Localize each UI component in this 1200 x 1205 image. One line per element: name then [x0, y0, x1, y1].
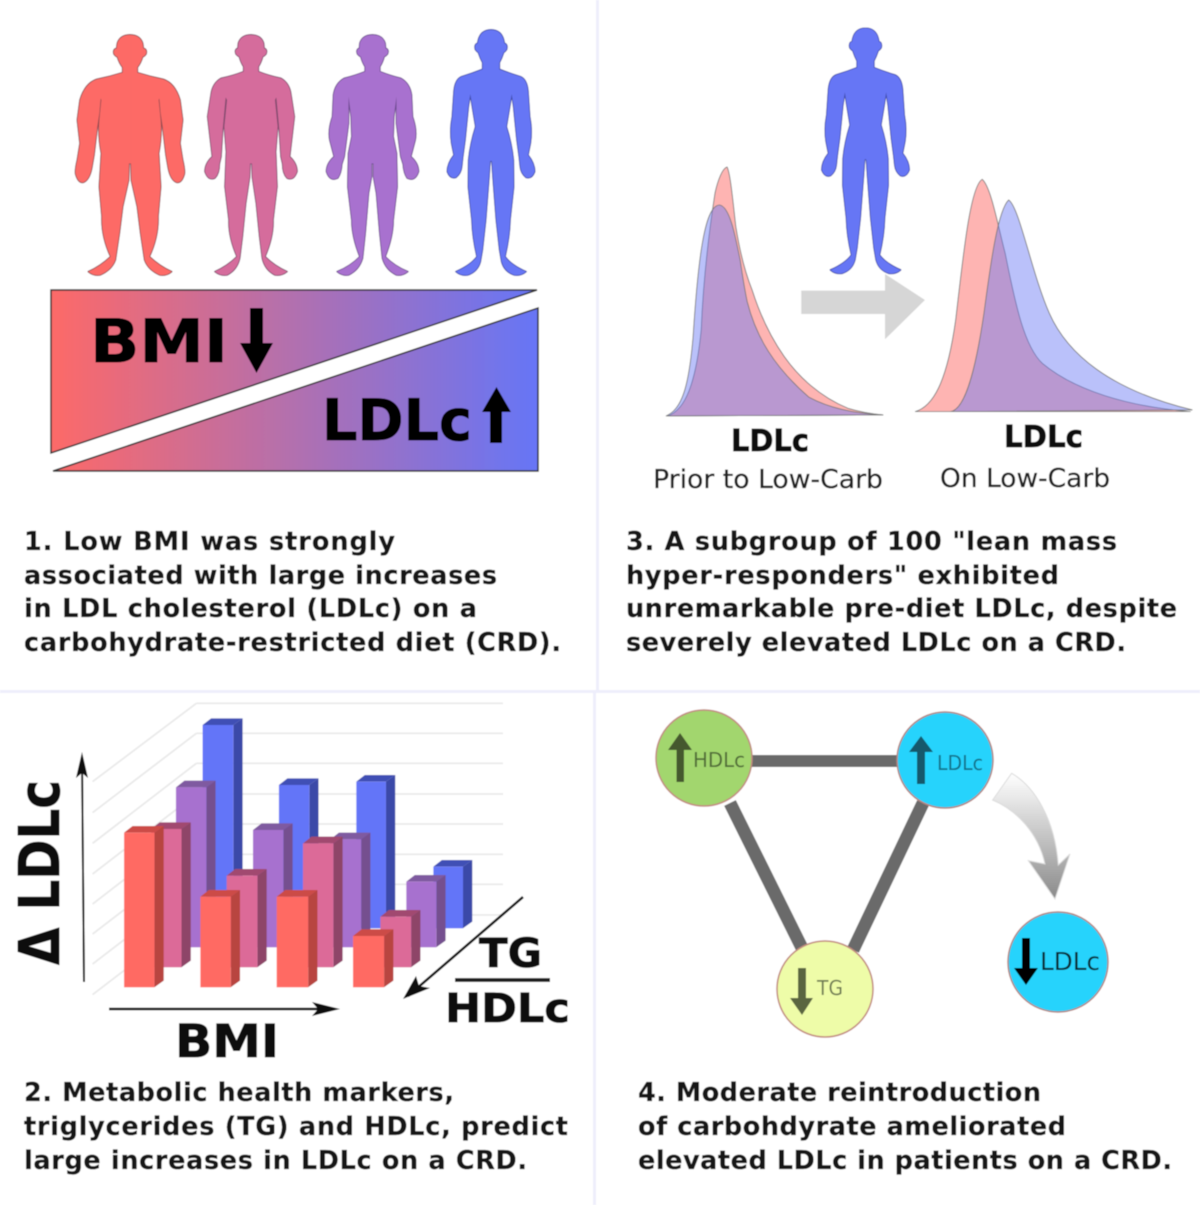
- arrow: y axis: [76, 752, 88, 982]
- arrow: x axis: [109, 1002, 340, 1016]
- caption 1: associated with large increases: [24, 561, 497, 591]
- caption 4: 4. Moderate reintroduction: [638, 1078, 1041, 1108]
- node: HDLc: HDLc: [693, 748, 745, 772]
- label: BMI: BMI: [175, 1015, 279, 1068]
- label: LDLc prior: LDLc: [731, 424, 809, 459]
- connector: HDLc to TG: [730, 803, 802, 948]
- figure: lean blue body: [447, 30, 535, 275]
- distribution: on low-carb: [915, 179, 1192, 412]
- caption 4: [638, 1078, 1172, 1176]
- bars: red row: [124, 826, 393, 987]
- caption 1: 1. Low BMI was strongly: [24, 527, 395, 557]
- caption 3: unremarkable pre-diet LDLc, despite: [626, 594, 1177, 624]
- caption 2: [24, 1078, 568, 1176]
- node: lowered LDLc: LDLc: [1040, 947, 1100, 976]
- label: TG over HDLc: [445, 931, 570, 1032]
- caption 2: large increases in LDLc on a CRD.: [24, 1146, 527, 1176]
- panel: 3D bar chart: [8, 703, 570, 1176]
- node: lowered LDLc: [1008, 912, 1108, 1012]
- figure: lean blue body: [822, 28, 909, 273]
- caption 4: elevated LDLc in patients on a CRD.: [638, 1146, 1172, 1176]
- lower wedge: LDLc: [53, 308, 538, 471]
- icon: BMI down arrow: [240, 308, 273, 373]
- connector: LDLc to TG: [853, 803, 923, 950]
- figure: purple body: [327, 35, 418, 275]
- upper wedge: BMI: [51, 290, 537, 453]
- bars: purple row: [176, 781, 446, 947]
- caption 3: 3. A subgroup of 100 "lean mass: [626, 527, 1117, 557]
- caption 1: [24, 527, 561, 658]
- distribution: prior to low-carb: [666, 167, 883, 416]
- label: prior to low-carb: Prior to Low-Carb: [653, 465, 883, 495]
- label: LDLc on: LDLc: [1004, 420, 1083, 455]
- node: TG: [777, 941, 873, 1037]
- caption 3: [626, 527, 1177, 658]
- label: TG over HDLc: TG: [479, 931, 542, 977]
- caption 1: in LDL cholesterol (LDLc) on a: [24, 594, 477, 624]
- label: delta LDLc: Δ LDLc: [8, 780, 73, 965]
- caption 4: of carbohdyrate ameliorated: [638, 1112, 1066, 1142]
- panel: BMI and LDLc: [24, 30, 561, 658]
- label: BMI: BMI: [90, 307, 228, 377]
- node: LDLc: LDLc: [937, 751, 983, 775]
- caption 1: carbohydrate-restricted diet (CRD).: [24, 628, 561, 658]
- arrow: curved gradient: [993, 773, 1070, 899]
- node: TG: TG: [816, 976, 843, 1000]
- caption 2: triglycerides (TG) and HDLc, predict: [24, 1112, 568, 1142]
- connector: HDLc to LDLc: [750, 755, 900, 767]
- arrow: depth axis: [403, 897, 523, 999]
- figure: pink body: [205, 35, 297, 275]
- caption 3: severely elevated LDLc on a CRD.: [626, 628, 1126, 658]
- bars: blue row: [203, 718, 472, 928]
- label: on low-carb: On Low-Carb: [940, 464, 1110, 494]
- icon: LDLc up arrow: [482, 387, 511, 443]
- node: LDLc: [897, 712, 993, 808]
- arrow: grey right: [801, 274, 925, 339]
- bar chart: [93, 703, 503, 995]
- figure: largest red body: [76, 35, 184, 275]
- panel: LDLc distributions: [626, 28, 1192, 658]
- panel: marker triangle: [638, 710, 1172, 1176]
- node: HDLc: [656, 710, 752, 806]
- caption 3: hyper-responders" exhibited: [626, 561, 1059, 591]
- label: LDLc: LDLc: [322, 388, 472, 454]
- label: TG over HDLc: HDLc: [445, 986, 570, 1032]
- bars: pink row: [151, 822, 420, 967]
- caption 2: 2. Metabolic health markers,: [24, 1078, 454, 1108]
